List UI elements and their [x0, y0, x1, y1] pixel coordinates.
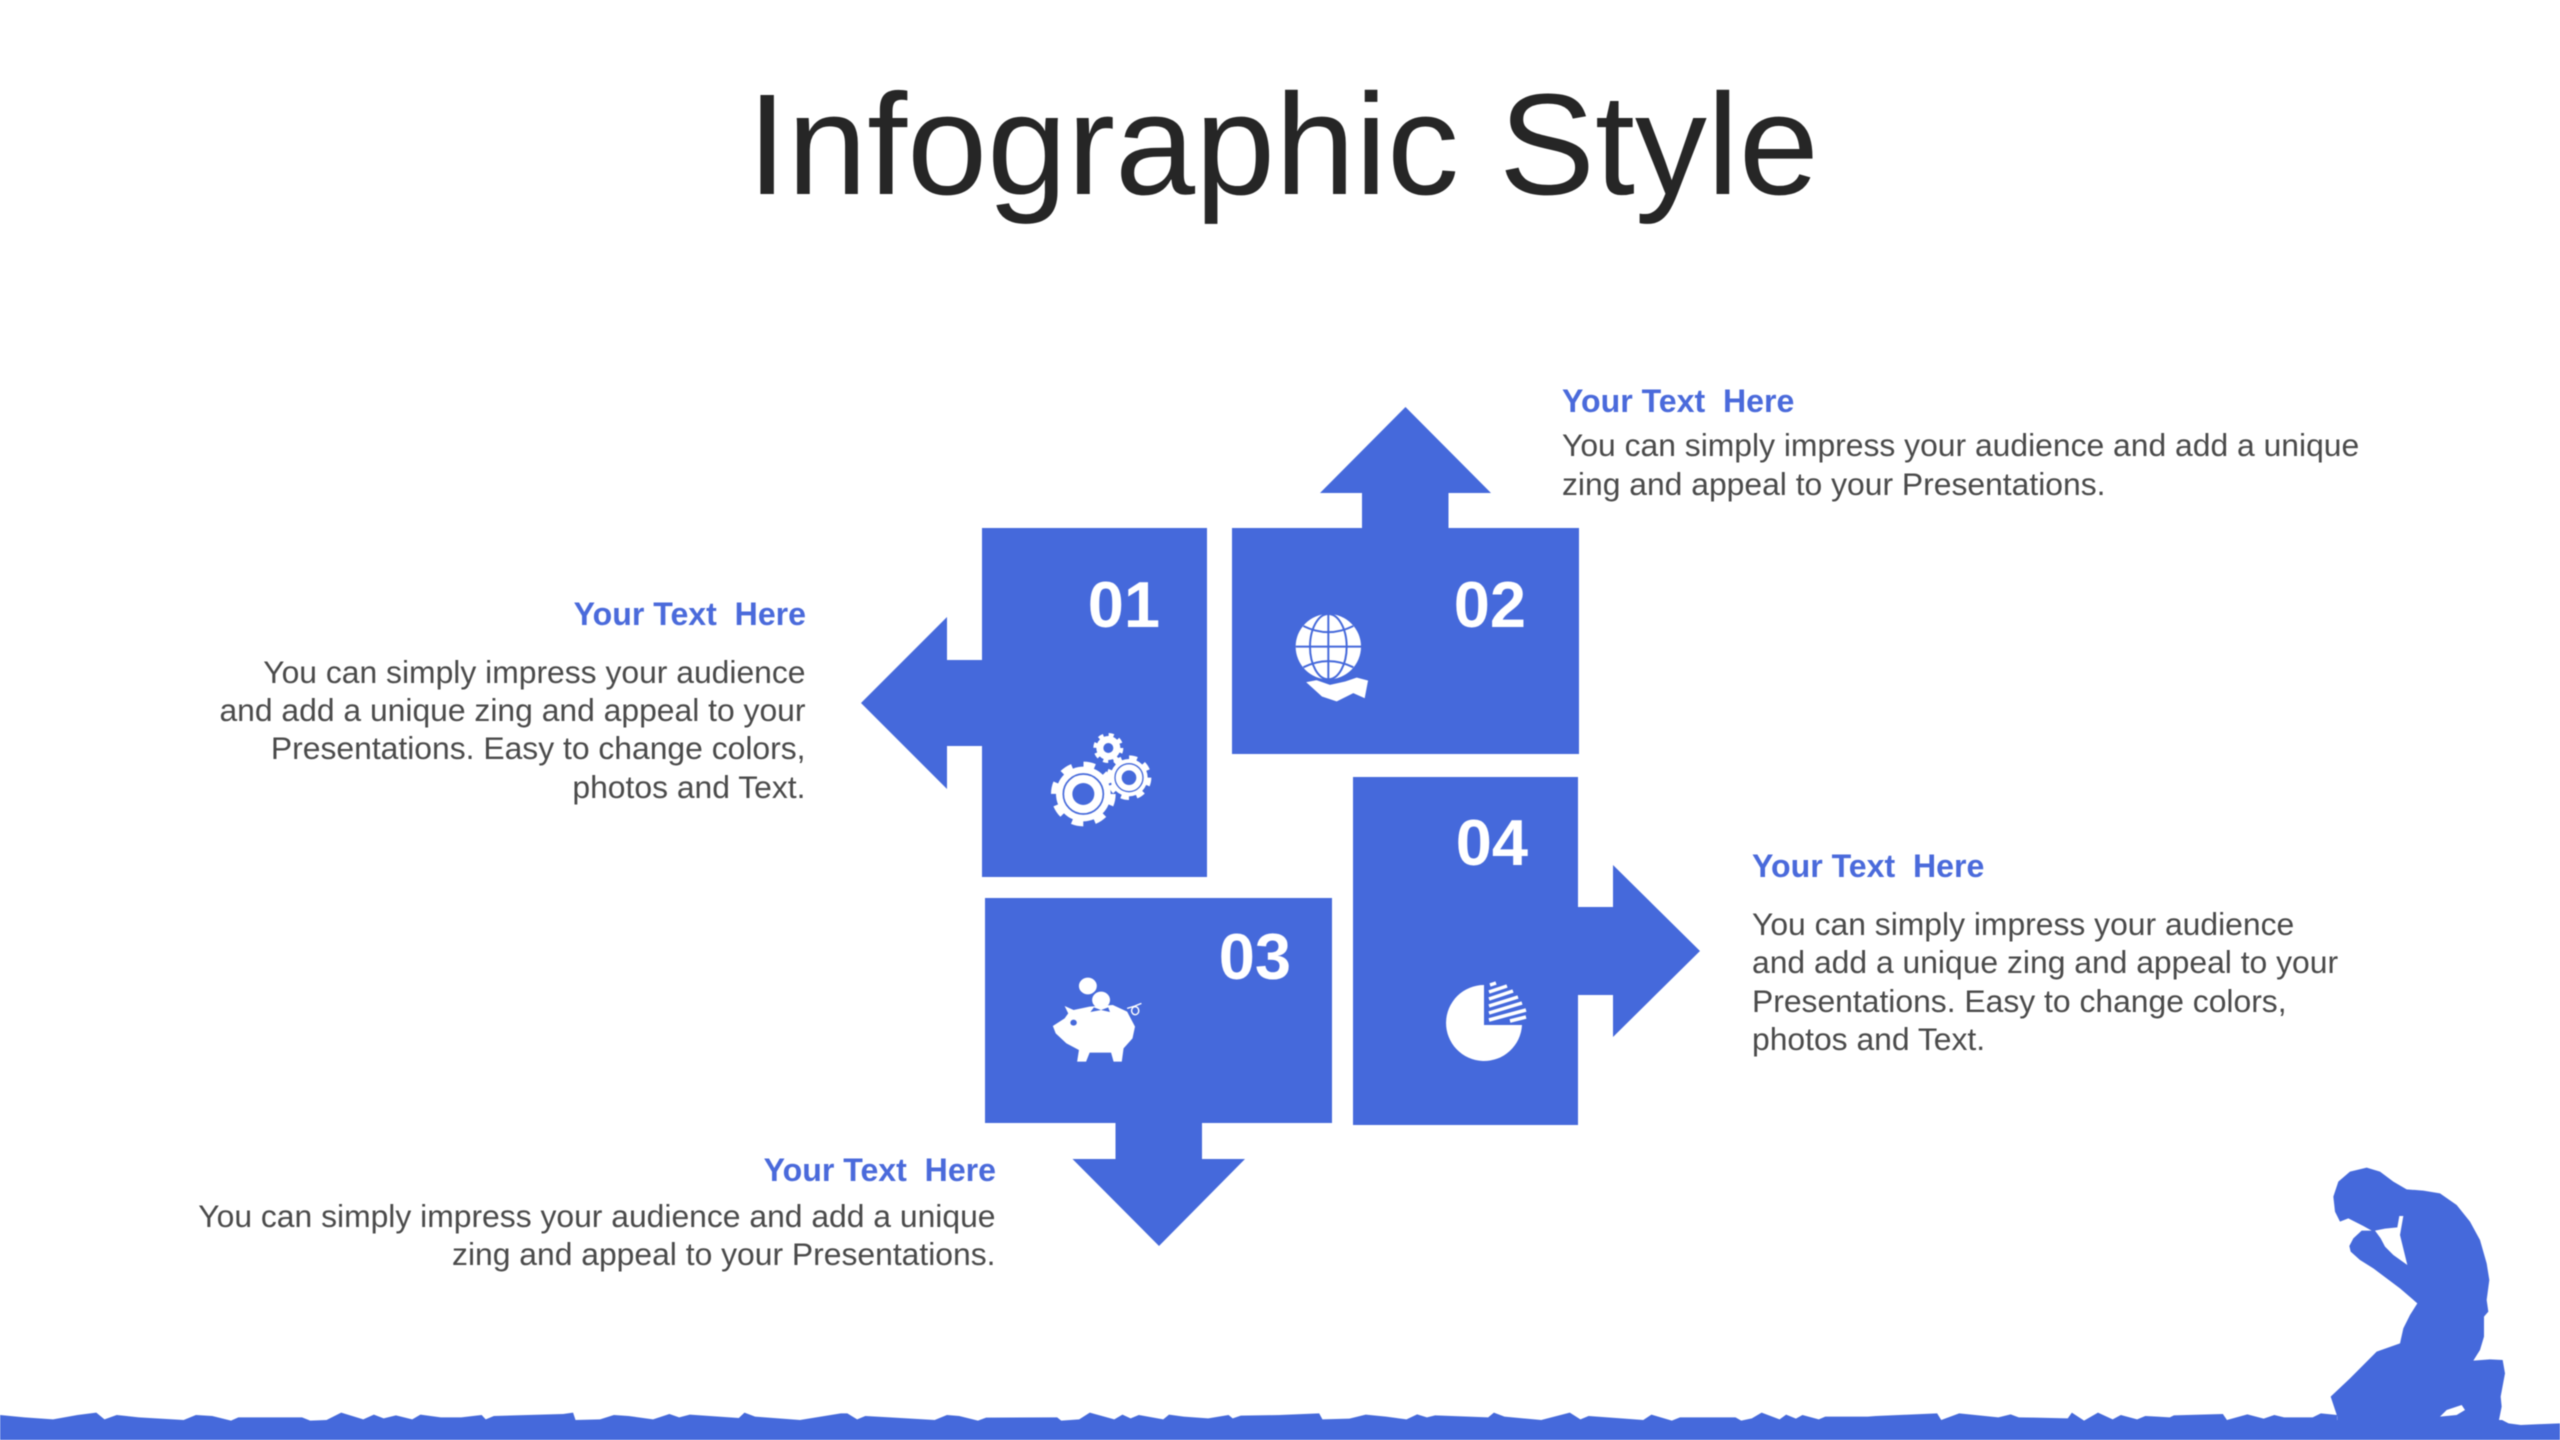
text block 04	[1752, 848, 2338, 1057]
heading 03: Your Text Here	[764, 1152, 996, 1188]
body 01: You can simply impress your audience	[263, 654, 806, 690]
panel 03: down arrow block	[985, 898, 1332, 1246]
heading 04: Your Text Here	[1752, 848, 1984, 884]
panel 01: left arrow block	[861, 528, 1207, 877]
number 03: 03	[1219, 920, 1291, 993]
body 02	[1562, 427, 2359, 502]
icon: pie chart	[1446, 983, 1526, 1061]
body 03	[198, 1198, 996, 1272]
body 01	[219, 654, 806, 805]
panel 02: up arrow block	[1232, 407, 1579, 754]
icon: piggy bank	[1053, 978, 1141, 1062]
heading 01: Your Text Here	[574, 596, 806, 632]
heading 02: Your Text Here	[1562, 383, 1794, 419]
body 03: zing and appeal to your Presentations.	[452, 1236, 996, 1272]
body 03: You can simply impress your audience and add a unique	[198, 1198, 996, 1234]
body 04: Presentations. Easy to change colors,	[1752, 983, 2287, 1019]
body 04: photos and Text.	[1752, 1021, 1985, 1057]
ground strip	[0, 1413, 2560, 1440]
silhouette: kneeling praying man	[2331, 1168, 2505, 1427]
icon: gears	[1054, 735, 1149, 823]
panel 04: right arrow block	[1353, 777, 1700, 1125]
number 01: 01	[1088, 568, 1160, 641]
text block 01	[219, 596, 806, 805]
text block 02	[1562, 383, 2359, 502]
body 01: photos and Text.	[572, 769, 806, 805]
body 04: You can simply impress your audience	[1752, 906, 2294, 942]
body 01: Presentations. Easy to change colors,	[271, 730, 806, 766]
body 02: You can simply impress your audience and add a unique	[1562, 427, 2359, 463]
text block 03	[198, 1152, 996, 1272]
body 04: and add a unique zing and appeal to your	[1752, 944, 2338, 980]
title: Infographic Style	[747, 65, 1819, 225]
body 04	[1752, 906, 2338, 1057]
number 04: 04	[1456, 806, 1528, 879]
number 02: 02	[1454, 568, 1526, 641]
icon: globe in hand	[1296, 614, 1369, 702]
body 02: zing and appeal to your Presentations.	[1562, 466, 2105, 502]
body 01: and add a unique zing and appeal to your	[219, 692, 806, 728]
